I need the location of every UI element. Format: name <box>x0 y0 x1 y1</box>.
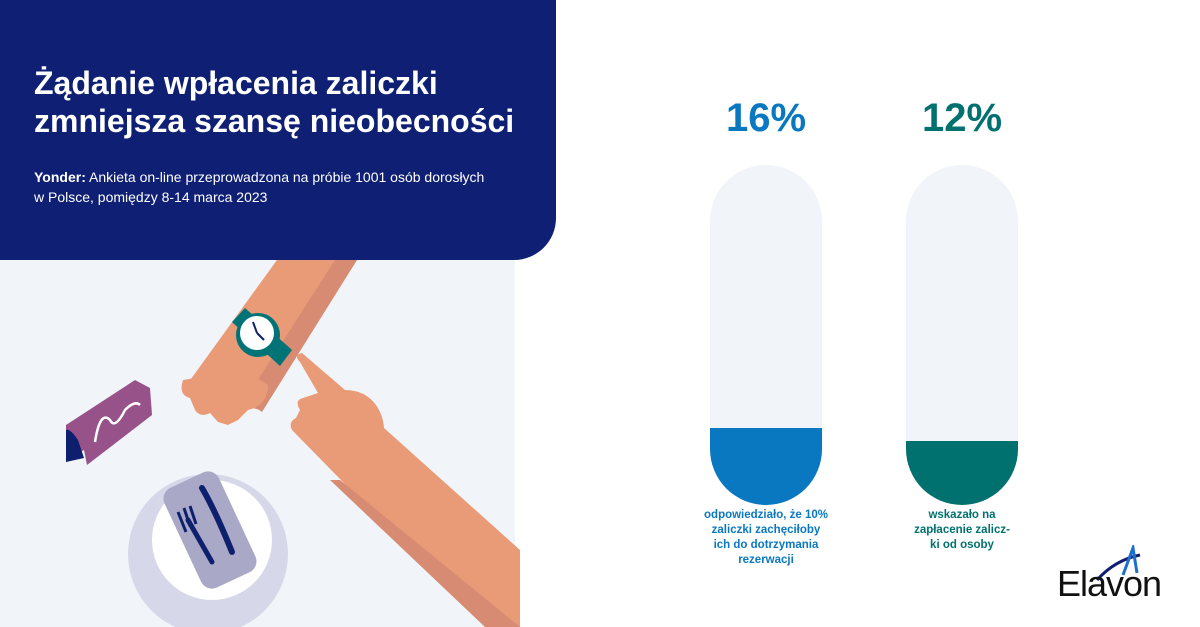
caption: 12%: ki od osoby <box>930 539 994 551</box>
title <box>34 65 514 139</box>
caption: 12%: wskazało na <box>928 509 996 521</box>
illustration <box>66 260 520 627</box>
icon: plate with cutlery <box>128 467 288 627</box>
panel: header box <box>0 0 556 260</box>
logo: Elavon <box>1057 545 1161 604</box>
bar chart: 16% <box>710 165 822 505</box>
title: zmniejsza szansę nieobecności <box>34 103 514 139</box>
logo: Elavon: Elavon <box>1057 563 1161 604</box>
icon: arm with watch <box>182 260 357 425</box>
subtitle source <box>34 169 484 205</box>
subtitle source: w Polsce, pomiędzy 8-14 marca 2023 <box>34 189 267 205</box>
caption: 16%: ich do dotrzymania <box>714 539 818 551</box>
caption: 16%: odpowiedziało, że 10% <box>704 509 828 521</box>
icon: purple table tent card <box>66 380 152 465</box>
caption: 12% <box>914 509 1010 551</box>
panel: illustration background <box>0 240 515 627</box>
stat: 12%: 12% <box>922 96 1002 140</box>
bar chart: 12% <box>906 165 1018 505</box>
caption: 12%: zapłacenie zalicz- <box>914 524 1010 536</box>
caption: 16% <box>704 509 828 566</box>
stat: 16%: 16% <box>726 96 806 140</box>
caption: 16%: rezerwacji <box>738 554 794 566</box>
icon: pointing hand arm <box>291 353 520 627</box>
title: Żądanie wpłacenia zaliczki <box>34 65 438 101</box>
subtitle source: Yonder: Ankieta on-line przeprowadzona na próbie 1001 osób dorosłych <box>34 169 484 185</box>
caption: 16%: zaliczki zachęciłoby <box>712 524 820 536</box>
